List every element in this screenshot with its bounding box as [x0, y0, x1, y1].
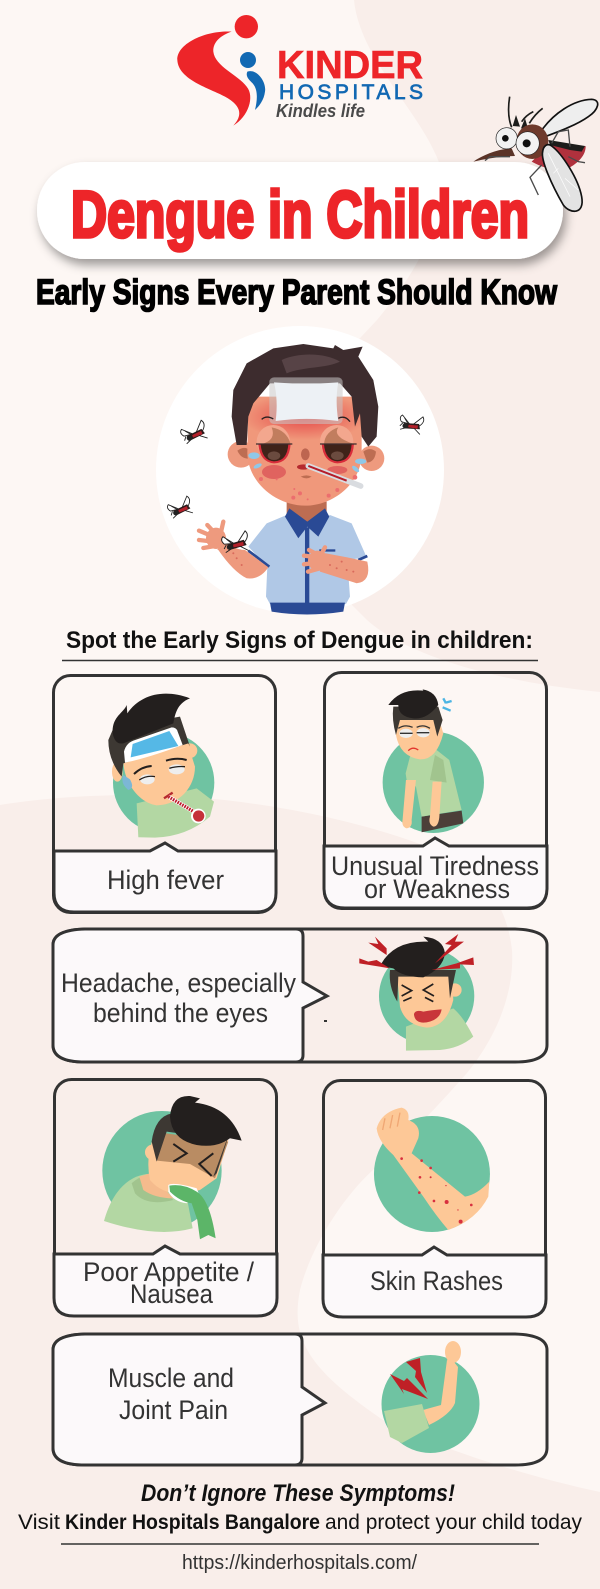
- icon: tired child: [383, 689, 484, 833]
- label box: [54, 843, 276, 912]
- logo wordmark: HOSPITALS: [279, 81, 423, 104]
- label: Poor Appetite /: [83, 1257, 254, 1287]
- icon: logo mark: [177, 15, 265, 126]
- logo wordmark: KINDER: [277, 44, 423, 87]
- icon: arm with rash: [374, 1108, 490, 1232]
- callout box: [53, 929, 327, 1062]
- label box: [324, 838, 547, 908]
- title pill: [37, 162, 563, 259]
- label: [331, 851, 539, 904]
- label: Headache, especially: [61, 968, 296, 998]
- icon: arm with joint pain: [382, 1341, 480, 1453]
- label: Nausea: [130, 1279, 214, 1309]
- icons: mosquitoes around boy: [166, 413, 424, 555]
- label: Skin Rashes: [370, 1266, 503, 1296]
- boy: [199, 344, 384, 614]
- label: Muscle and: [108, 1363, 234, 1393]
- label: High fever: [107, 865, 224, 895]
- footer call to action: [18, 1480, 582, 1574]
- icon: mosquito: [473, 97, 598, 211]
- label: [108, 1363, 234, 1425]
- panel: skin rashes: [323, 1080, 546, 1317]
- logo wordmark: [276, 44, 423, 121]
- label: [61, 968, 296, 1028]
- label: or Weakness: [364, 874, 510, 904]
- heading: warning: Don’t Ignore These Symptoms!: [141, 1480, 455, 1507]
- label: Joint Pain: [119, 1395, 228, 1425]
- text: visit line: [18, 1511, 582, 1534]
- icon: nauseous child: [102, 1096, 242, 1239]
- icon: child with headache: [359, 934, 474, 1051]
- text: website url: https://kinderhospitals.com/: [182, 1552, 417, 1574]
- hero illustration: sick boy: [156, 326, 444, 614]
- icon: child with fever: [108, 694, 214, 838]
- section heading: Spot the Early Signs of Dengue in children:: [66, 627, 533, 654]
- text: visit line: Kinder Hospitals Bangalore: [65, 1511, 320, 1534]
- logo: Kinder Hospitals: [177, 15, 423, 126]
- label box: [323, 1247, 546, 1317]
- label: Unusual Tiredness: [331, 851, 539, 881]
- label: [83, 1257, 254, 1309]
- panel: poor appetite: [54, 1080, 277, 1316]
- callout box: [53, 1334, 325, 1465]
- panel: high fever: [54, 676, 276, 912]
- logo wordmark: Kindles life: [276, 101, 365, 121]
- label: behind the eyes: [93, 998, 268, 1028]
- panel: muscle and joint pain: [53, 1334, 547, 1465]
- panel: tiredness: [324, 672, 547, 908]
- text: visit line: Visit: [18, 1511, 60, 1534]
- panel: headache: [53, 929, 547, 1062]
- text: visit line: and protect your child today: [325, 1511, 582, 1534]
- label box: [54, 1246, 277, 1316]
